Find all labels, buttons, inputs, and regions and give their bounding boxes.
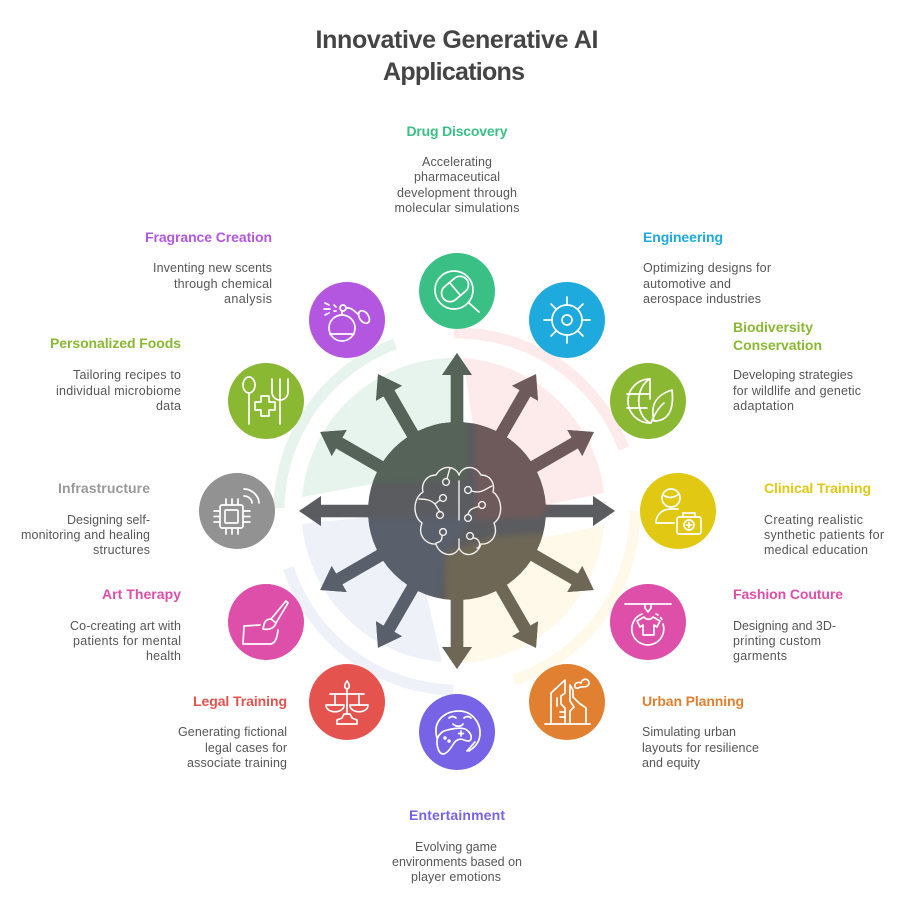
- description: [733, 619, 836, 663]
- description: synthetic patients for: [764, 528, 884, 542]
- heading: Art Therapy: [102, 586, 181, 602]
- icon: spoon, fork and medical cross: [228, 363, 304, 439]
- description: for wildlife and genetic: [733, 384, 861, 398]
- description: Creating realistic: [764, 513, 863, 527]
- heading: Engineering: [643, 229, 723, 245]
- description: [392, 840, 522, 884]
- description: health: [146, 649, 181, 663]
- description: molecular simulations: [394, 201, 520, 215]
- panel: Urban Planning: [529, 664, 759, 770]
- heading: Entertainment: [409, 807, 505, 823]
- icon: city buildings: [529, 664, 605, 740]
- description: environments based on: [392, 855, 522, 869]
- description: associate training: [187, 756, 287, 770]
- title: Applications: [383, 58, 525, 86]
- heading: Drug Discovery: [406, 123, 508, 139]
- panel: Drug Discovery: [394, 123, 520, 329]
- description: adaptation: [733, 399, 794, 413]
- description: analysis: [224, 292, 272, 306]
- description: Designing self-: [67, 513, 150, 527]
- heading: Biodiversity: [733, 319, 813, 335]
- description: [733, 368, 861, 413]
- description: development through: [397, 186, 517, 200]
- description: and equity: [642, 756, 701, 770]
- heading: Personalized Foods: [50, 335, 181, 351]
- panel: Personalized Foods: [50, 335, 304, 439]
- description: Tailoring recipes to: [73, 368, 181, 382]
- panel: Infrastructure: [21, 473, 275, 557]
- heading: Legal Training: [193, 693, 287, 709]
- heading: Fragrance Creation: [145, 229, 272, 245]
- description: [643, 261, 771, 306]
- description: [70, 619, 181, 663]
- icon: 3D printed shirt: [610, 584, 686, 660]
- heading: Fashion Couture: [733, 586, 843, 602]
- description: data: [156, 399, 181, 413]
- panel: Art Therapy: [70, 584, 304, 663]
- description: through chemical: [174, 277, 272, 291]
- heading: Urban Planning: [642, 693, 744, 709]
- description: patients for mental: [73, 634, 181, 648]
- description: layouts for resilience: [642, 741, 759, 755]
- description: legal cases for: [205, 741, 287, 755]
- description: [178, 725, 287, 770]
- icon: globe and leaf: [610, 363, 686, 439]
- description: Inventing new scents: [153, 261, 272, 275]
- description: Evolving game: [415, 840, 497, 854]
- description: [764, 513, 884, 557]
- heading: [733, 319, 822, 353]
- description: [56, 368, 181, 413]
- background pinwheel sectors: [302, 358, 604, 663]
- icon: patient and medical case: [640, 473, 716, 549]
- description: [642, 725, 759, 770]
- description: Accelerating: [422, 155, 492, 169]
- panel: Fashion Couture: [610, 584, 843, 663]
- description: pharmaceutical: [414, 170, 500, 184]
- description: Developing strategies: [733, 368, 853, 382]
- description: individual microbiome: [56, 384, 181, 398]
- panel: Legal Training: [178, 664, 385, 770]
- heading: Conservation: [733, 337, 822, 353]
- icon: paintbrush and canvas: [228, 584, 304, 660]
- description: Generating fictional: [178, 725, 287, 739]
- panel: Biodiversity Conservation: [610, 319, 861, 439]
- description: structures: [93, 543, 150, 557]
- outer decorative arcs: [279, 333, 635, 690]
- central hub with radiating arrows: [299, 353, 615, 669]
- description: [21, 513, 150, 557]
- panel: Entertainment: [392, 694, 522, 884]
- description: printing custom: [733, 634, 821, 648]
- description: monitoring and healing: [21, 528, 150, 542]
- description: garments: [733, 649, 787, 663]
- icon: brain circuit: [415, 467, 501, 555]
- description: aerospace industries: [643, 292, 761, 306]
- description: [153, 261, 272, 306]
- icon: game controller and face: [419, 694, 495, 770]
- icon: pill under magnifier: [419, 253, 495, 329]
- description: Optimizing designs for: [643, 261, 771, 275]
- title: [316, 26, 598, 86]
- panel: Engineering: [529, 229, 771, 358]
- description: [394, 155, 520, 215]
- description: Simulating urban: [642, 725, 736, 739]
- description: Designing and 3D-: [733, 619, 836, 633]
- heading: Infrastructure: [58, 480, 150, 496]
- panel: Clinical Training: [640, 473, 884, 557]
- description: Co-creating art with: [70, 619, 181, 633]
- title: Innovative Generative AI: [316, 26, 598, 54]
- icon: gear: [529, 282, 605, 358]
- heading: Clinical Training: [764, 480, 871, 496]
- description: player emotions: [411, 870, 501, 884]
- panel: Fragrance Creation: [145, 229, 385, 358]
- description: medical education: [764, 543, 868, 557]
- icon: smart chip: [199, 473, 275, 549]
- description: automotive and: [643, 277, 731, 291]
- icon: scales of justice: [309, 664, 385, 740]
- icon: perfume bottle: [309, 282, 385, 358]
